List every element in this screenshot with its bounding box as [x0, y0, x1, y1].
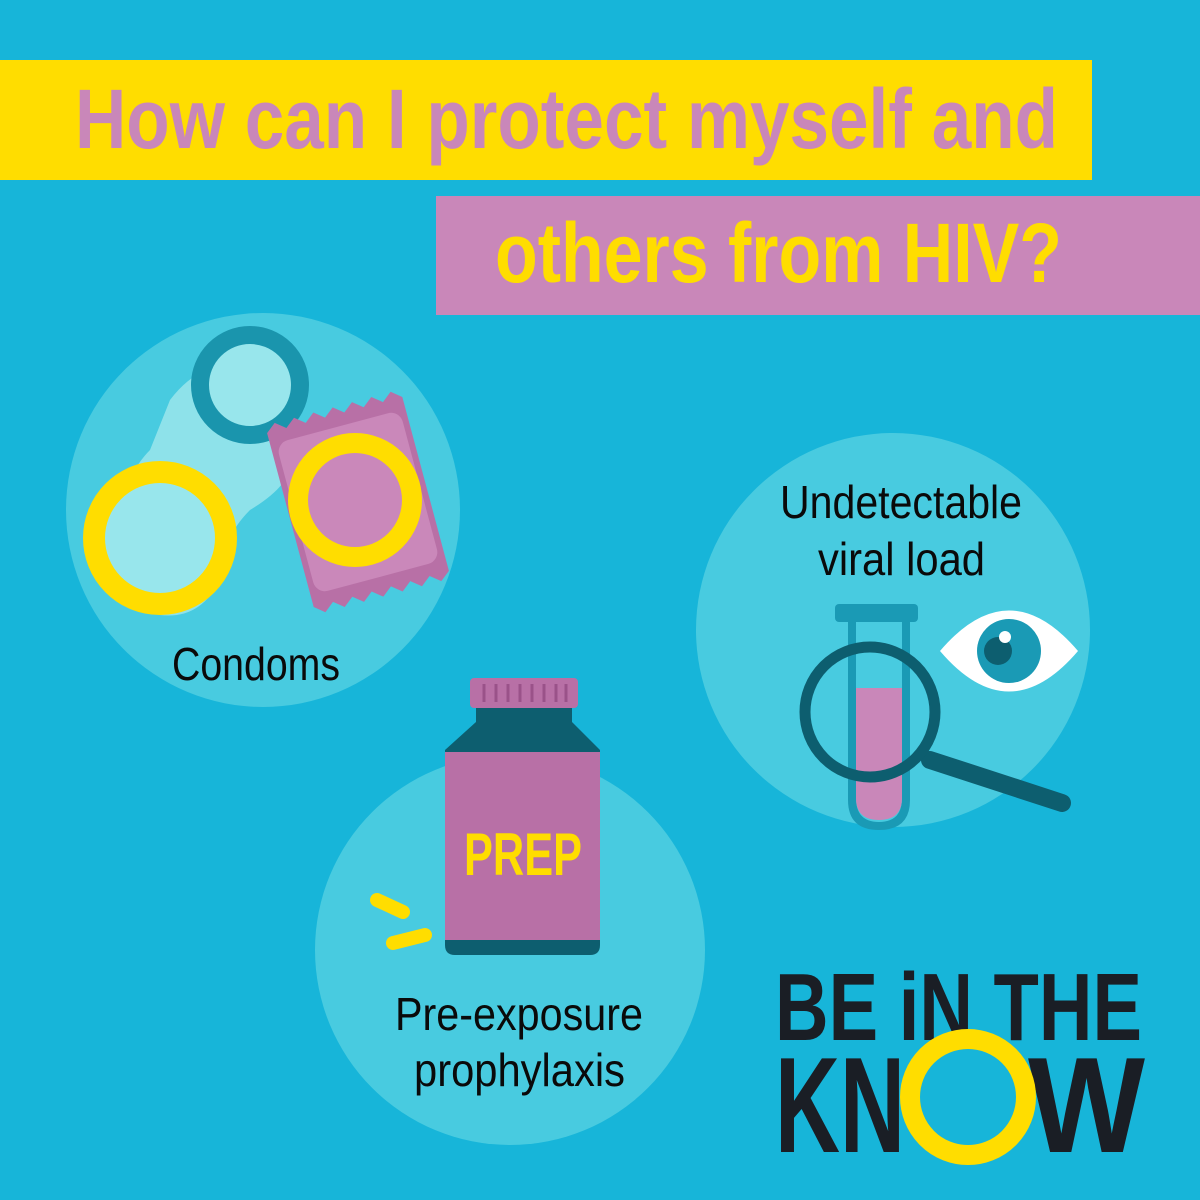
title line 2: others from HIV?: [495, 206, 1062, 300]
label: prep: Pre-exposure: [395, 988, 643, 1040]
label: viral load: [780, 476, 1022, 585]
icon: condoms: [94, 335, 451, 616]
icon: pill bottle: PREP: [464, 821, 582, 888]
icon: pills: [377, 900, 425, 943]
icon: pill bottle: [445, 678, 600, 955]
label: prep: [395, 988, 643, 1096]
label: condoms: Condoms: [172, 638, 340, 690]
icon: test tube: [835, 604, 918, 830]
title line 1: [0, 60, 1092, 180]
label: viral load: viral load: [818, 533, 985, 585]
panel: prep: [315, 678, 705, 1145]
panel: viral load: [696, 433, 1090, 830]
logo: [775, 954, 1146, 1181]
panel: condoms: [66, 313, 460, 707]
label: prep: prophylaxis: [414, 1044, 625, 1096]
icon: eye: [940, 610, 1078, 692]
label: viral load: Undetectable: [780, 476, 1022, 528]
icon: magnifier: [805, 647, 1062, 803]
logo: W: [1028, 1029, 1146, 1181]
logo: KN: [775, 1029, 905, 1181]
